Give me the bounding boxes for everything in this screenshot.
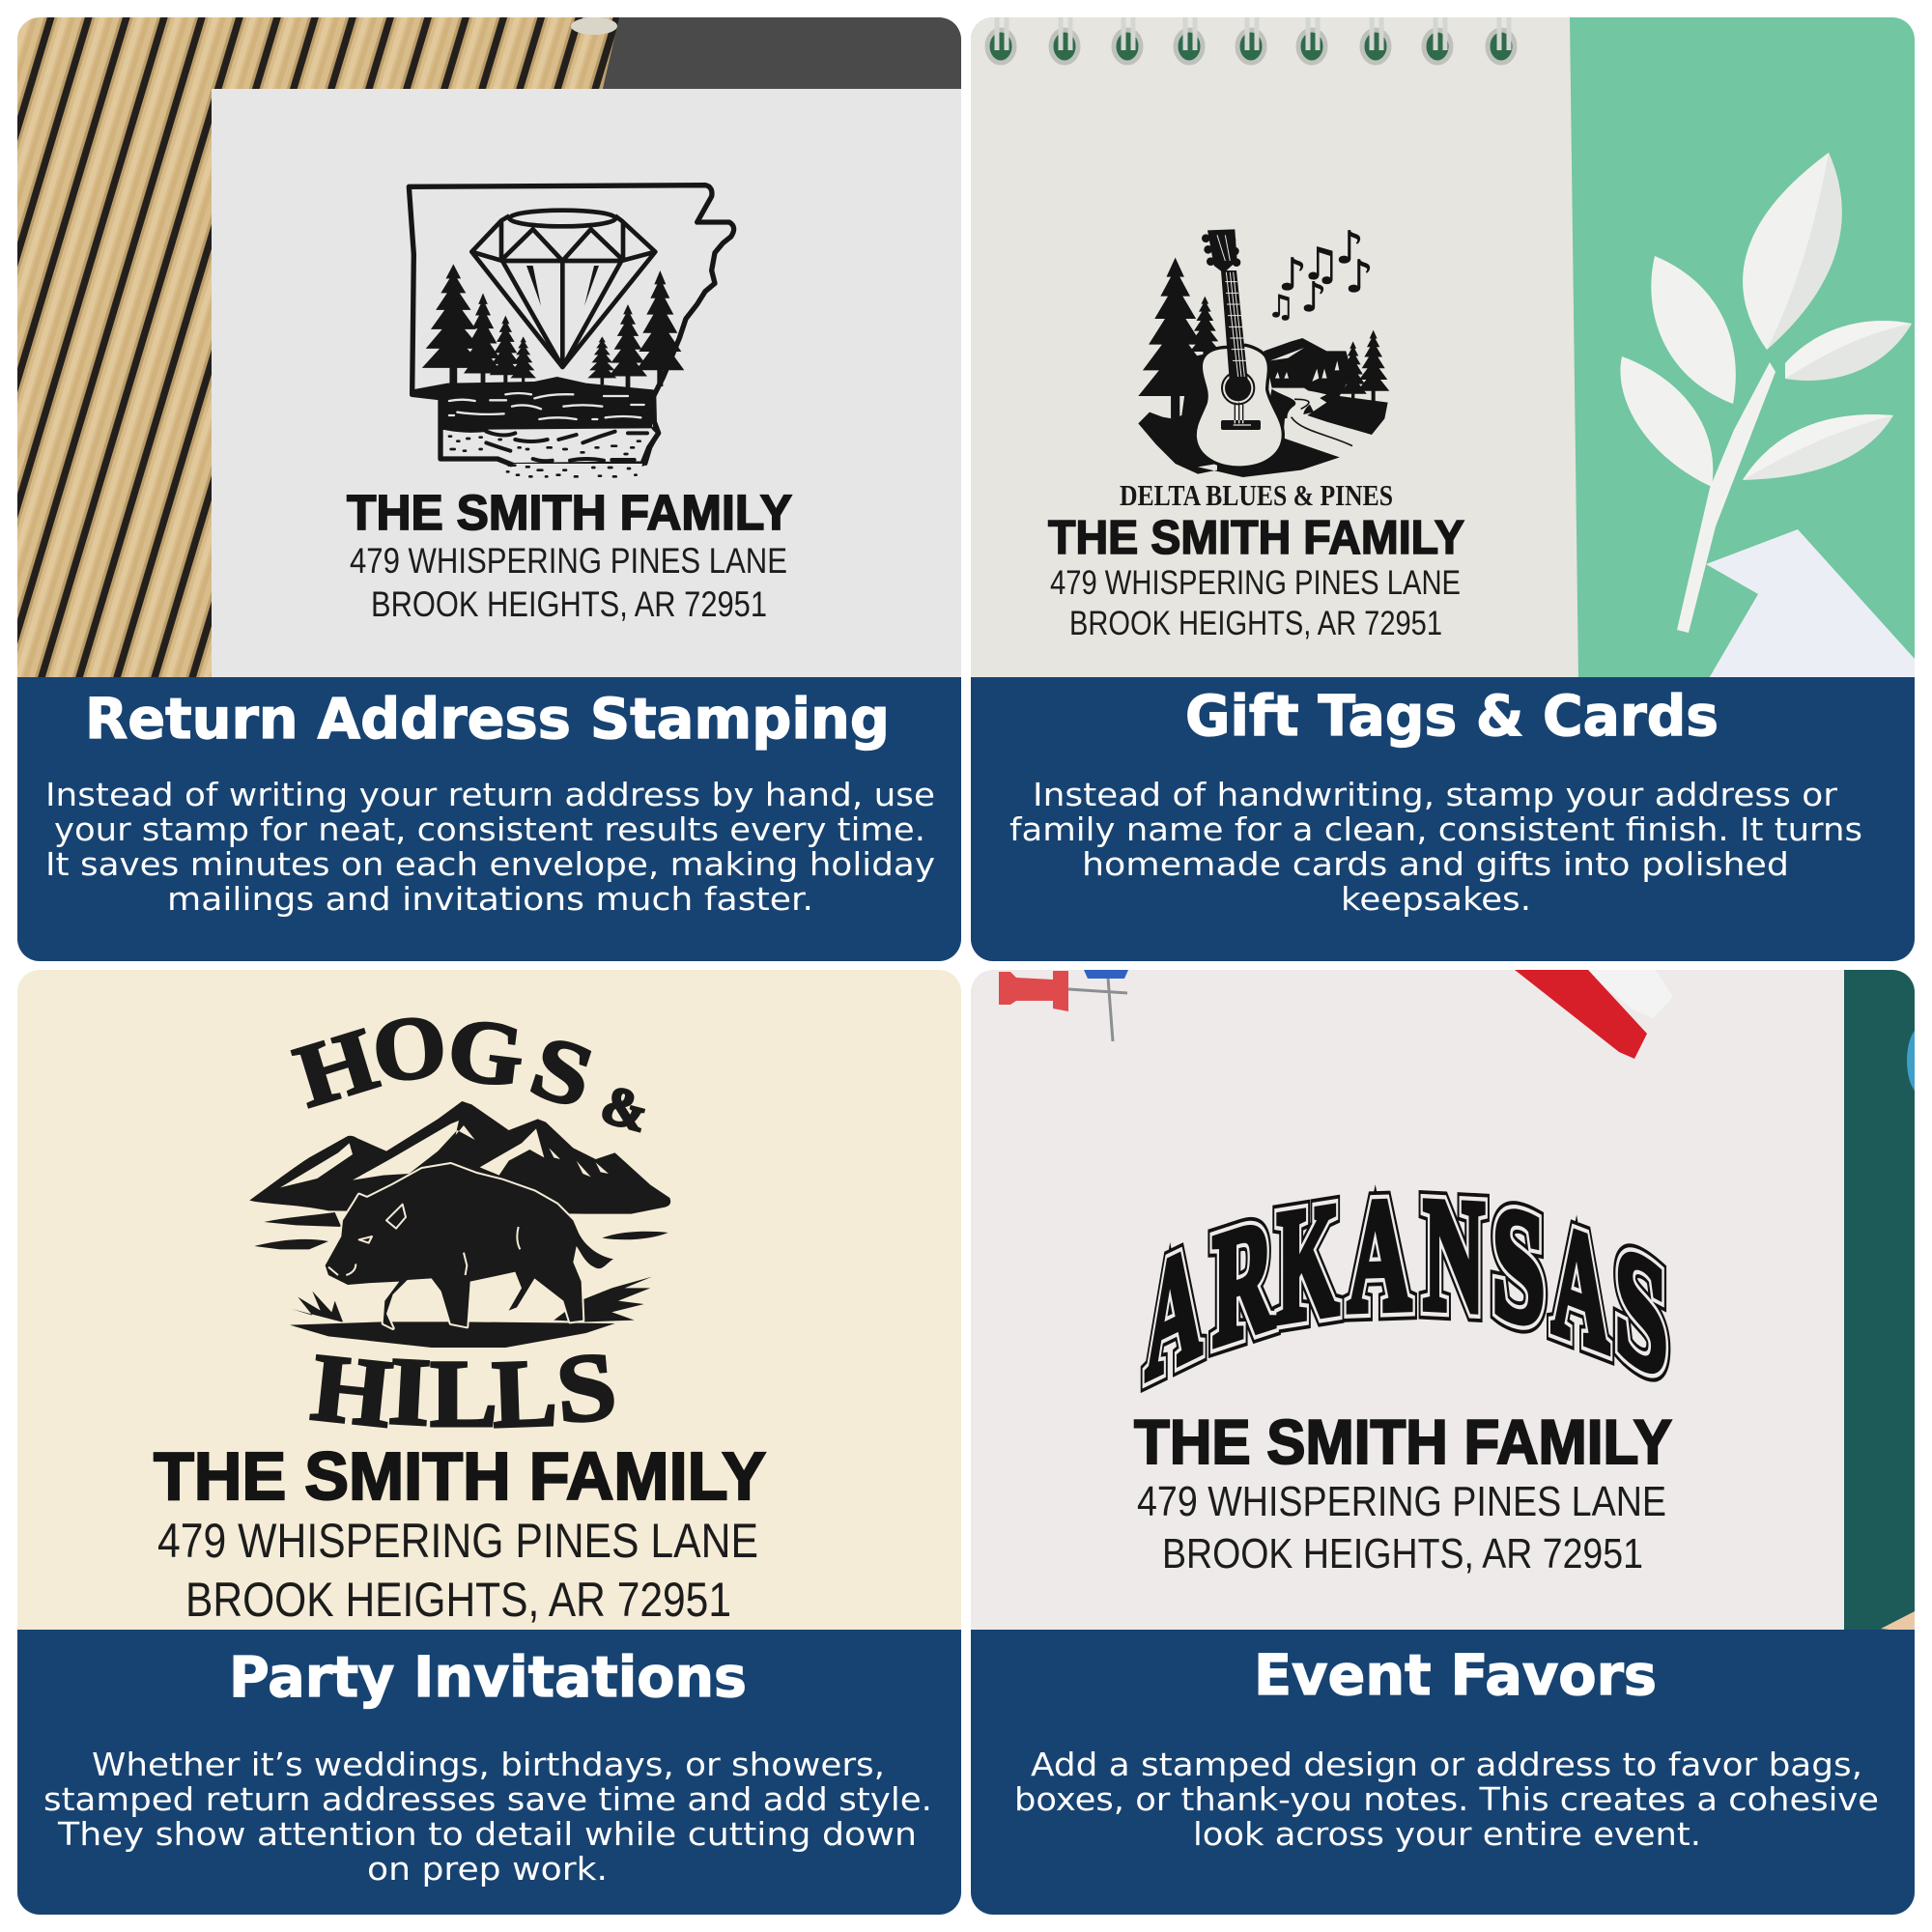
right lower leaf [1743, 414, 1893, 480]
left lower leaf [1620, 356, 1713, 487]
water streaks [254, 1212, 668, 1249]
music notes [1267, 221, 1374, 325]
boar [326, 1164, 613, 1328]
stamp text: THE SMITH FAMILY [154, 1438, 766, 1514]
caption band [17, 677, 961, 961]
body text: keepsakes. [1341, 880, 1531, 918]
panel: event favors [971, 970, 1932, 1916]
letter inline gap: R [1212, 1182, 1275, 1380]
stamp heading: HOGS & [285, 996, 654, 1144]
white paper [971, 970, 1850, 1636]
body text: Instead of handwriting, stamp your address or [1033, 776, 1837, 813]
letter fills: A [1348, 1165, 1411, 1345]
letter fills [1146, 1165, 1667, 1414]
letter fills: R [1212, 1182, 1275, 1380]
caption band [17, 1630, 961, 1916]
body text: mailings and invitations much faster. [167, 880, 813, 918]
head [1208, 229, 1237, 273]
body text: on prep work. [367, 1850, 608, 1888]
stamp: guitar and pines [1138, 229, 1389, 477]
green backdrop [971, 17, 1915, 684]
letter fills: K [1277, 1170, 1339, 1357]
bridge [1221, 420, 1261, 430]
stamp heading: HILLS [307, 1331, 620, 1448]
river ripples [449, 393, 644, 419]
music notes: ♪ [1335, 221, 1364, 273]
stamp heading: HILLS: H [307, 1334, 396, 1448]
ground right of river [1265, 388, 1340, 470]
photo background: bamboo mat [17, 17, 961, 684]
heading: Return Address Stamping [85, 686, 890, 752]
pine trees [422, 264, 684, 388]
stamp heading: HOGS &: & [595, 1074, 654, 1144]
state outline [409, 185, 734, 466]
panel: party invitations [17, 970, 961, 1916]
stamp text: 479 WHISPERING PINES LANE [1137, 1478, 1666, 1525]
letter outlines: S [1615, 1208, 1667, 1414]
body text: It saves minutes on each envelope, making holiday [45, 845, 935, 883]
spiral binding [987, 17, 1515, 63]
stamp heading: HOGS &: H [285, 1010, 387, 1126]
panel: return address stamping [17, 17, 965, 961]
panel: gift tags and cards [971, 17, 1915, 961]
letter outlines: R [1212, 1182, 1275, 1380]
stamp heading: HILLS: L [430, 1341, 497, 1447]
heading: Party Invitations [229, 1644, 747, 1710]
grass and ground [290, 1277, 652, 1348]
paper leaf branch [1620, 153, 1912, 633]
stamp text: BROOK HEIGHTS, AR 72951 [1069, 605, 1442, 642]
stamp heading: HOGS &: S [520, 1017, 605, 1127]
stamp text: BROOK HEIGHTS, AR 72951 [371, 584, 767, 624]
stamp text: 479 WHISPERING PINES LANE [157, 1514, 758, 1568]
stamp text [1048, 478, 1464, 642]
stamp text [154, 1438, 766, 1627]
caption band [971, 1630, 1915, 1916]
shore speckles [449, 437, 640, 476]
sound hole [1222, 372, 1254, 404]
stamp text: THE SMITH FAMILY [347, 485, 792, 540]
cream paper [17, 970, 961, 1636]
notebook page [971, 17, 1578, 680]
body text [1009, 776, 1862, 918]
stem [1677, 362, 1776, 633]
stamp art: mountains and boar [249, 1101, 670, 1348]
dark slate surface [603, 17, 961, 89]
letter inline gap: A [1348, 1165, 1411, 1345]
letter inline gap: A [1146, 1208, 1202, 1413]
caption band [971, 677, 1915, 961]
left upper leaf [1651, 256, 1736, 404]
ground [1138, 351, 1340, 477]
mountains [1264, 338, 1388, 435]
letter fills: A [1551, 1186, 1609, 1387]
cord knot [571, 17, 617, 35]
letter outlines: N [1423, 1165, 1485, 1346]
folded paper envelope [1706, 529, 1915, 680]
right upper leaf [1785, 321, 1912, 381]
letter inline gap: S [1615, 1208, 1667, 1414]
shore [446, 428, 659, 464]
letter fills: A [1146, 1208, 1202, 1413]
letter fills: S [1492, 1172, 1545, 1360]
letter inline gap: S [1492, 1172, 1545, 1360]
guitar body [1195, 345, 1283, 468]
body text: Instead of writing your return address by hand, use [45, 776, 935, 813]
music notes: ♪ [1301, 273, 1326, 321]
snow caps [280, 1121, 609, 1187]
stamp: Arkansas state emblem [409, 185, 734, 480]
mountain highlights [1270, 348, 1339, 382]
heading: Gift Tags & Cards [1185, 683, 1719, 749]
letter outlines: A [1146, 1208, 1202, 1413]
stamp heading: HILLS: I [386, 1337, 433, 1446]
neck [1221, 270, 1248, 380]
body text: They show attention to detail while cutting down [57, 1815, 917, 1853]
body text: stamped return addresses save time and add style. [43, 1780, 932, 1818]
body text [1014, 1746, 1879, 1853]
music notes: ♫ [1267, 288, 1294, 325]
trees [1138, 258, 1389, 418]
body text [43, 1746, 932, 1888]
body text: Whether it’s weddings, birthdays, or showers, [92, 1746, 885, 1783]
river [412, 377, 654, 430]
stamp text: 479 WHISPERING PINES LANE [350, 541, 787, 581]
heading: Event Favors [1254, 1642, 1657, 1708]
body text: boxes, or thank-you notes. This creates a cohesive [1014, 1780, 1879, 1818]
guitar strings [1234, 403, 1251, 425]
music notes: ♪ [1278, 248, 1307, 300]
wooden corner [1881, 1611, 1915, 1633]
stamp heading: ARKANSAS varsity letters [1146, 1165, 1667, 1414]
letter inline gap [1146, 1165, 1667, 1414]
diamond [471, 211, 655, 367]
stamp text [347, 485, 792, 624]
music notes: ♫ [1300, 238, 1341, 290]
letter outlines: A [1551, 1186, 1609, 1387]
stamp text: THE SMITH FAMILY [1134, 1406, 1672, 1477]
letter outlines: S [1492, 1172, 1545, 1360]
stamp text [1134, 1406, 1672, 1577]
river ripple lines [1292, 399, 1352, 446]
body text [45, 776, 935, 918]
letter fills: S [1615, 1208, 1667, 1414]
stamp heading: HILLS: L [491, 1339, 558, 1448]
stamp text: DELTA BLUES & PINES [1120, 478, 1393, 512]
stamp heading: HOGS &: G [443, 999, 529, 1106]
stamp text: BROOK HEIGHTS, AR 72951 [185, 1573, 731, 1627]
letter inline gap: A [1551, 1186, 1609, 1387]
bottom edge mask [511, 464, 642, 468]
stamp heading: HILLS: S [553, 1331, 620, 1443]
letter outlines: K [1277, 1170, 1339, 1357]
teal book [1844, 970, 1921, 1636]
boar details [328, 1205, 520, 1275]
letter inline gap: N [1423, 1165, 1485, 1346]
white paper [212, 89, 965, 680]
blue object edge [1907, 1026, 1932, 1095]
body text: look across your entire event. [1193, 1815, 1701, 1853]
stamp text: THE SMITH FAMILY [1048, 512, 1464, 564]
music notes: ♪ [1345, 250, 1374, 302]
letter inline gap: K [1277, 1170, 1339, 1357]
stamp heading: HOGS &: O [368, 996, 451, 1101]
letter outlines [1146, 1165, 1667, 1414]
letter outlines: A [1348, 1165, 1411, 1345]
body text: homemade cards and gifts into polished [1082, 845, 1789, 883]
stamp text: 479 WHISPERING PINES LANE [1050, 564, 1461, 602]
tuners [1202, 234, 1240, 267]
push pins [999, 970, 1128, 1041]
body text: your stamp for neat, consistent results every time. [54, 810, 925, 848]
frets and strings [1225, 272, 1246, 377]
body text: Add a stamped design or address to favor bags, [1031, 1746, 1862, 1783]
mountains [249, 1101, 670, 1214]
river [1271, 388, 1327, 418]
red marker [1515, 970, 1673, 1059]
top leaf [1743, 153, 1842, 350]
stamp text: BROOK HEIGHTS, AR 72951 [1162, 1530, 1643, 1577]
letter fills: N [1423, 1165, 1485, 1346]
body text: family name for a clean, consistent finish. It turns [1009, 810, 1862, 848]
